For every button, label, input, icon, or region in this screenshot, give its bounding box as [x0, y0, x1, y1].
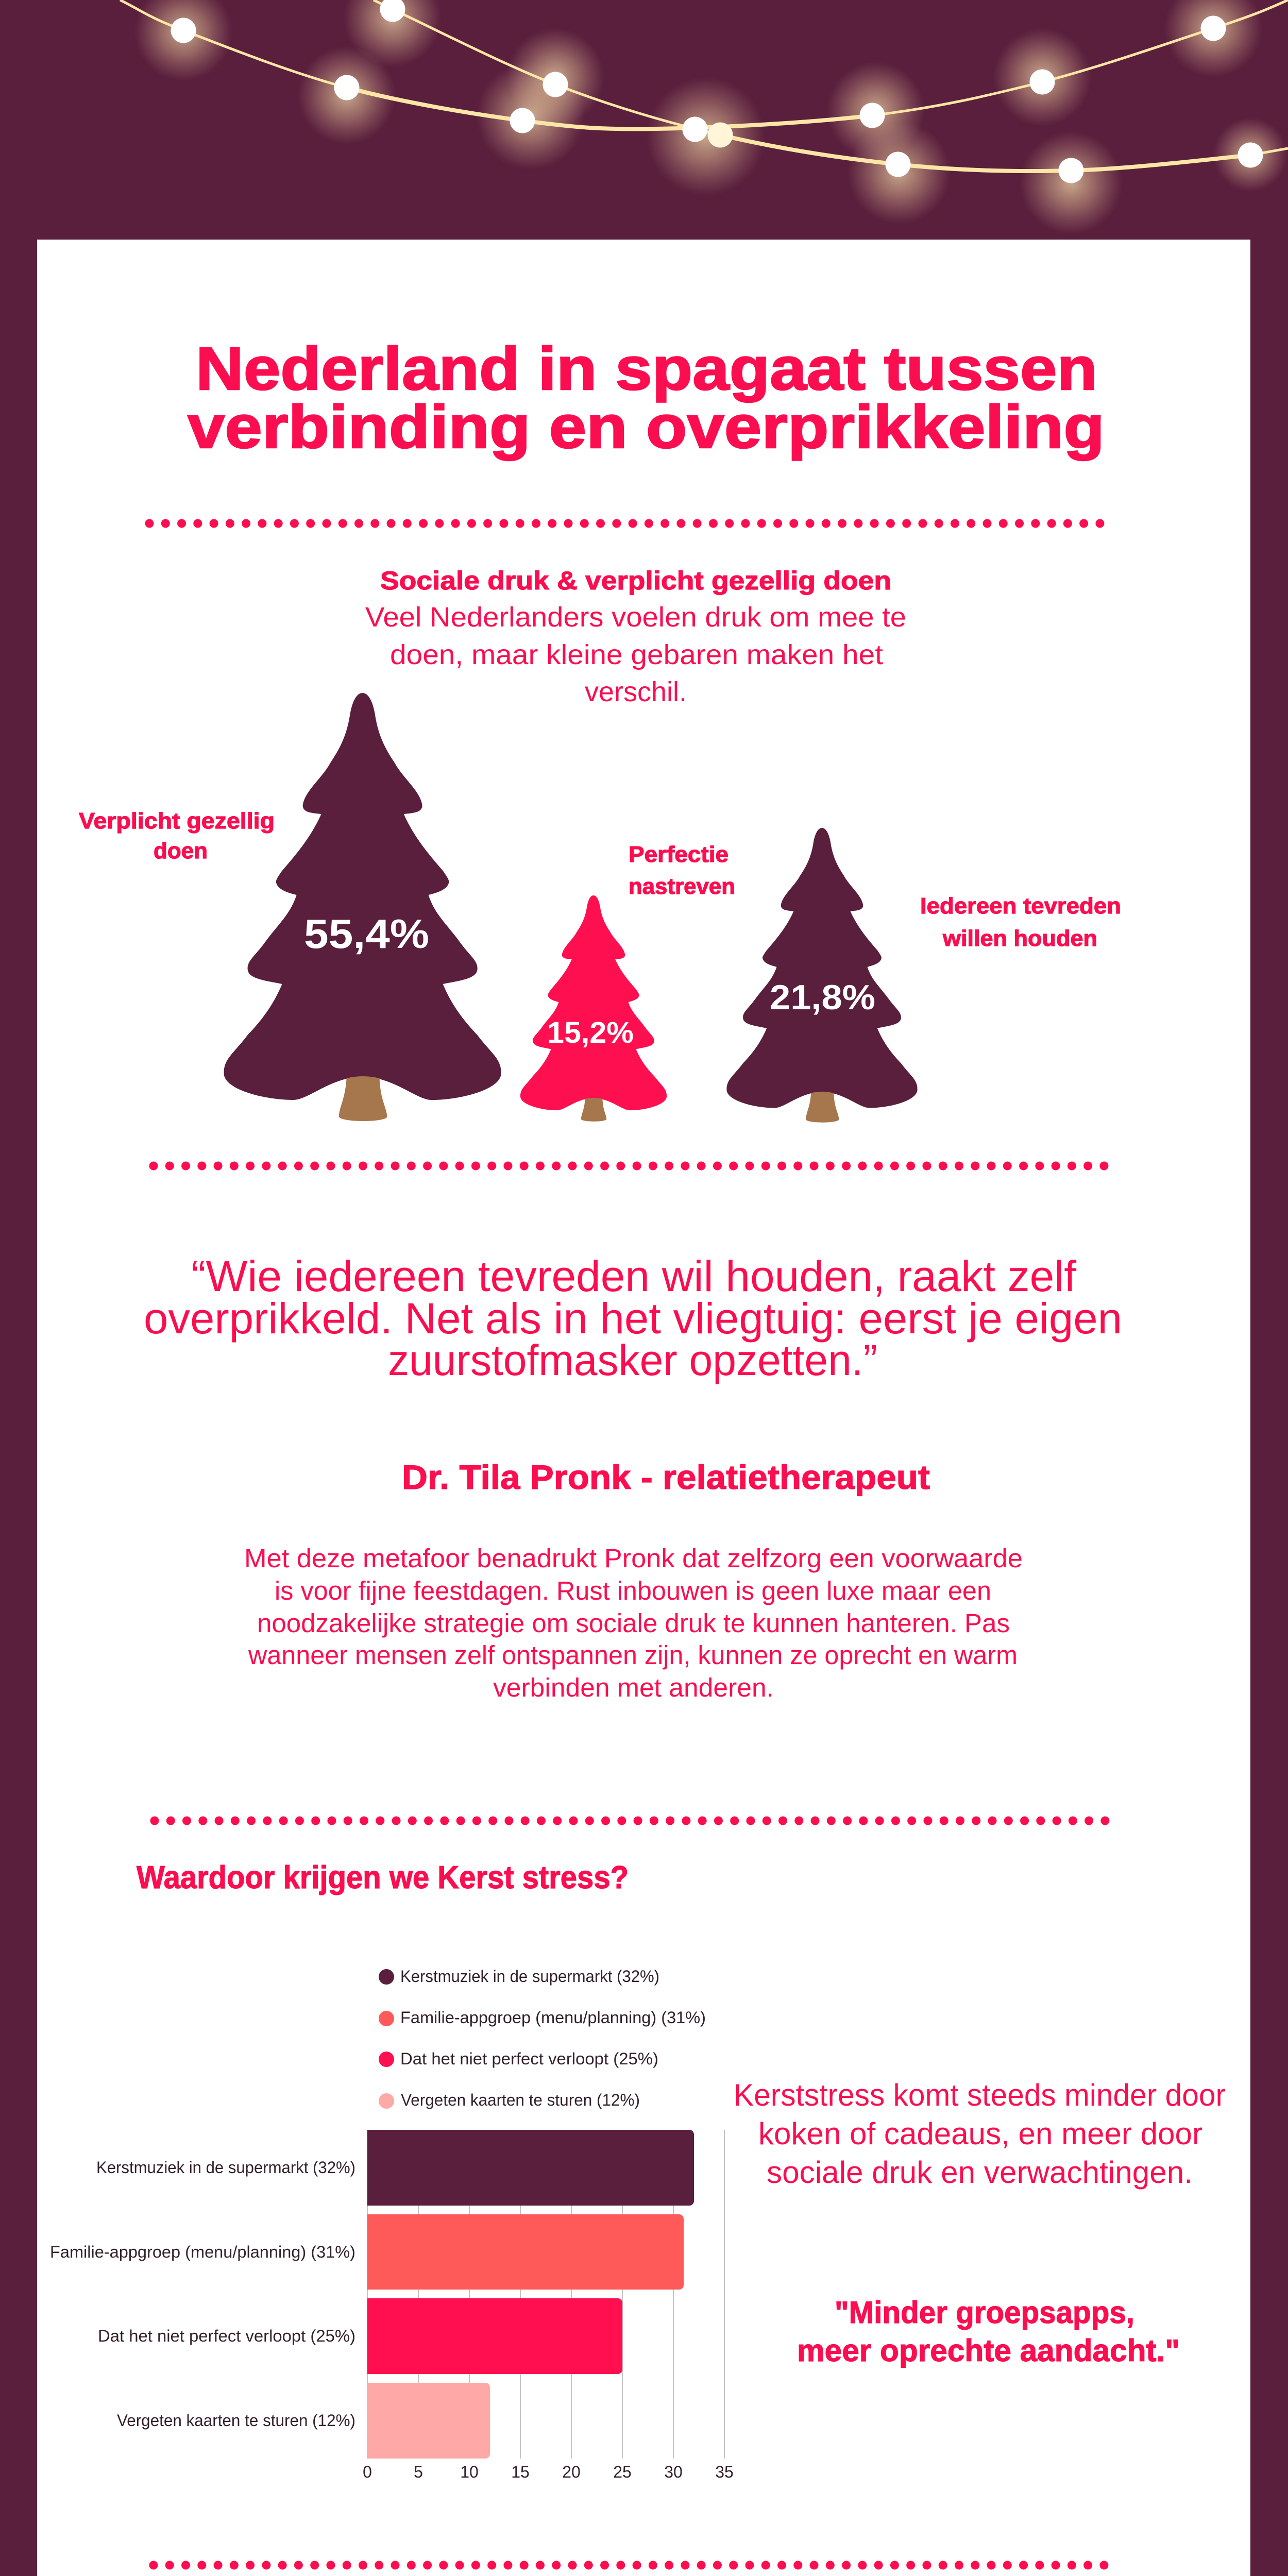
label: iedereen tevreden willen houden: willen houden — [942, 926, 1097, 951]
intro text block — [365, 566, 906, 707]
label: iedereen tevreden willen houden — [920, 893, 1121, 951]
intro text block: Sociale druk & verplicht gezellig doen — [380, 566, 891, 595]
dotted divider 1 — [149, 519, 1116, 528]
paragraph 1: wanneer mensen zelf ontspannen zijn, kunnen ze oprecht en warm — [248, 1640, 1018, 1670]
label: verplicht gezellig doen: doen — [154, 838, 208, 863]
side text: sociale druk en verwachtingen. — [767, 2155, 1193, 2190]
axis tick labels: 30 — [664, 2463, 683, 2481]
label: perfectie nastreven — [629, 842, 735, 899]
paragraph 1: is voor fijne feestdagen. Rust inbouwen is geen luxe maar een — [275, 1576, 991, 1605]
intro text block: doen, maar kleine gebaren maken het — [390, 639, 883, 670]
intro text block: Veel Nederlanders voelen druk om mee te — [365, 602, 906, 633]
side text: Kerststress komt steeds minder door — [734, 2078, 1226, 2112]
label: perfectie nastreven: Perfectie — [629, 842, 728, 867]
quote 1 attribution: Dr. Tila Pronk - relatietherapeut — [402, 1458, 930, 1496]
label: iedereen tevreden willen houden: Iedereen tevreden — [920, 893, 1121, 919]
paragraph 1: verbinden met anderen. — [493, 1673, 774, 1702]
chart legend: Vergeten kaarten te sturen (12%) — [401, 2091, 640, 2109]
side callout: meer oprechte aandacht." — [797, 2333, 1180, 2368]
tree chart — [79, 693, 1121, 1123]
axis tick labels: 25 — [613, 2463, 632, 2481]
category labels: Dat het niet perfect verloopt (25%) — [98, 2327, 355, 2345]
intro text block: verschil. — [585, 676, 687, 707]
paragraph 1: noodzakelijke strategie om sociale druk te kunnen hanteren. Pas — [257, 1608, 1010, 1638]
paragraph 1: Met deze metafoor benadrukt Pronk dat zelfzorg een voorwaarde — [244, 1544, 1023, 1573]
value: 21,8%: 21,8% — [770, 978, 875, 1017]
axis tick labels: 0 — [363, 2463, 372, 2481]
tree: iedereen tevreden willen houden 21,8% — [726, 828, 918, 1123]
chart legend: Kerstmuziek in de supermarkt (32%) — [400, 1967, 659, 1986]
label: verplicht gezellig doen — [79, 808, 275, 863]
axis tick labels: 10 — [460, 2463, 479, 2481]
chart heading: Waardoor krijgen we Kerst stress? — [137, 1860, 629, 1895]
quote 1: “Wie iedereen tevreden wil houden, raakt zelf — [191, 1252, 1077, 1300]
title: Nederland in spagaat tussen — [196, 335, 1097, 403]
axis tick labels — [363, 2463, 734, 2481]
side text: koken of cadeaus, en meer door — [758, 2116, 1202, 2151]
side callout — [797, 2295, 1180, 2368]
axis tick labels: 35 — [715, 2463, 734, 2481]
title — [188, 335, 1105, 461]
title: verbinding en overprikkeling — [188, 393, 1105, 461]
bars — [367, 2130, 694, 2459]
bar chart — [50, 1967, 734, 2481]
axis tick labels: 20 — [562, 2463, 581, 2481]
axis tick labels: 5 — [414, 2463, 423, 2481]
string lights: top — [120, 0, 1288, 234]
chart legend: Familie-appgroep (menu/planning) (31%) — [400, 2008, 706, 2027]
dotted divider 2 — [154, 1161, 1120, 1171]
dotted divider 4 — [154, 2561, 1120, 2570]
category labels: Familie-appgroep (menu/planning) (31%) — [50, 2243, 355, 2261]
chart legend: Dat het niet perfect verloopt (25%) — [400, 2049, 658, 2068]
axis tick labels: 15 — [511, 2463, 530, 2481]
quote 1: overprikkeld. Net als in het vliegtuig: eerst je eigen — [144, 1294, 1122, 1343]
value: 15,2%: 15,2% — [547, 1016, 634, 1049]
tree: verplicht gezellig doen 55,4% — [224, 693, 501, 1121]
value: 55,4%: 55,4% — [304, 911, 429, 957]
quote 1 — [144, 1252, 1122, 1384]
quote 1: zuurstofmasker opzetten.” — [388, 1336, 877, 1384]
label: perfectie nastreven: nastreven — [629, 874, 735, 899]
side text — [734, 2078, 1226, 2190]
category labels: Vergeten kaarten te sturen (12%) — [117, 2411, 355, 2430]
paragraph 1 — [244, 1544, 1023, 1702]
tree: perfectie nastreven 15,2% — [520, 895, 667, 1122]
side callout: "Minder groepsapps, — [835, 2295, 1134, 2330]
category labels: Kerstmuziek in de supermarkt (32%) — [96, 2158, 355, 2177]
category labels — [50, 2158, 355, 2430]
chart grid lines — [367, 2130, 724, 2459]
chart legend — [379, 1967, 706, 2109]
label: verplicht gezellig doen: Verplicht gezellig — [79, 808, 275, 834]
dotted divider 3 — [155, 1817, 1121, 1825]
